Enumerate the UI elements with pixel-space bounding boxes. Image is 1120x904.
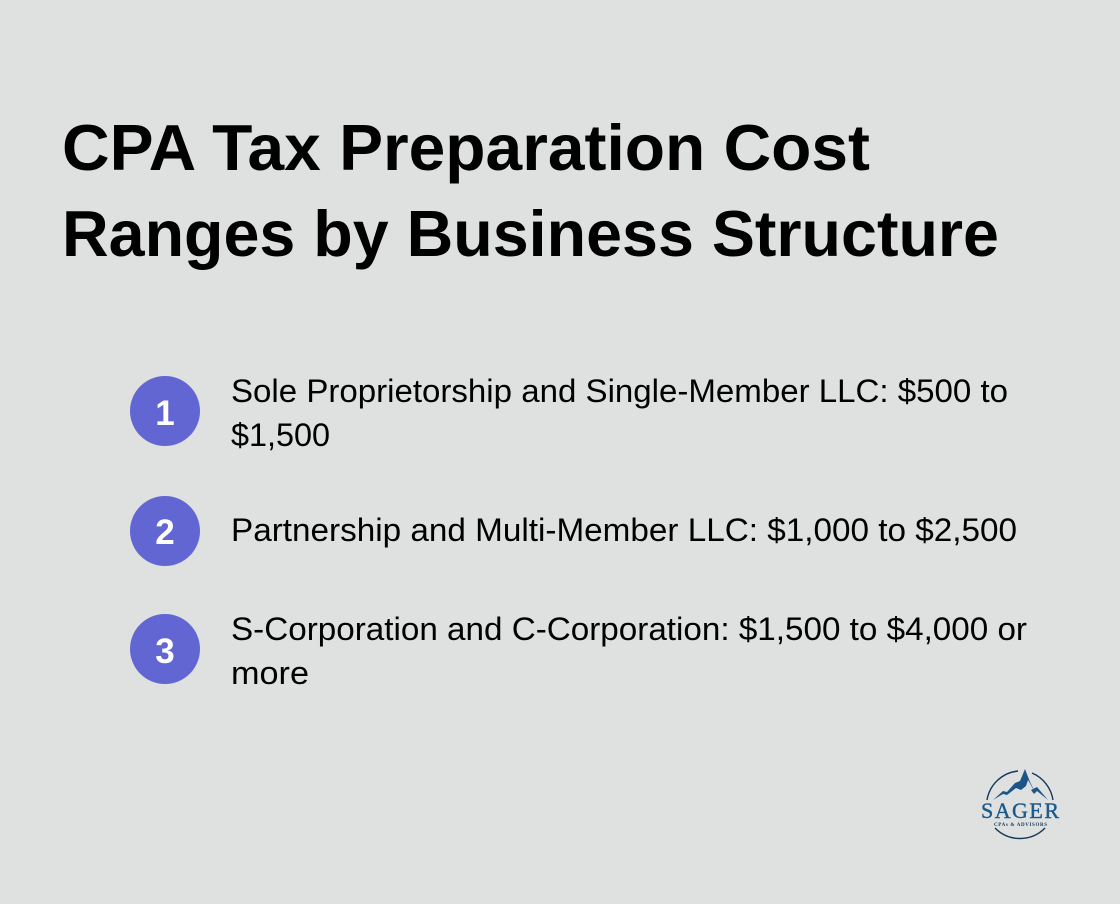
number badge 2 bbox=[130, 496, 200, 566]
title: CPA Tax Preparation Cost bbox=[62, 111, 870, 184]
title bbox=[62, 111, 999, 270]
item 1 text bbox=[231, 373, 1008, 453]
logo ring bbox=[987, 771, 1053, 839]
logo wordmark: SAGER bbox=[981, 798, 1059, 823]
number badge 3 bbox=[130, 614, 200, 684]
logo: Sager CPAs & Advisors bbox=[981, 769, 1059, 839]
item 3 text: more bbox=[231, 655, 309, 691]
number badge 2: 2 bbox=[155, 513, 175, 552]
logo mountains bbox=[993, 769, 1048, 800]
item 3 text: S-Corporation and C-Corporation: $1,500 to $4,000 or bbox=[231, 611, 1027, 647]
number badge 1 bbox=[130, 376, 200, 446]
list item 3: corporation bbox=[130, 611, 1027, 691]
item 3 text bbox=[231, 611, 1027, 691]
number badge 3: 3 bbox=[155, 632, 175, 671]
item 1 text: Sole Proprietorship and Single-Member LLC: $500 to bbox=[231, 373, 1008, 409]
list item 2: partnership bbox=[130, 496, 1017, 566]
item 2 text: Partnership and Multi-Member LLC: $1,000 to $2,500 bbox=[231, 512, 1017, 548]
item 1 text: $1,500 bbox=[231, 417, 330, 453]
title: Ranges by Business Structure bbox=[62, 197, 999, 270]
list item 1: sole proprietorship bbox=[130, 373, 1008, 453]
number badge 1: 1 bbox=[155, 394, 175, 433]
logo tagline: CPAs & ADVISORS bbox=[994, 823, 1047, 828]
